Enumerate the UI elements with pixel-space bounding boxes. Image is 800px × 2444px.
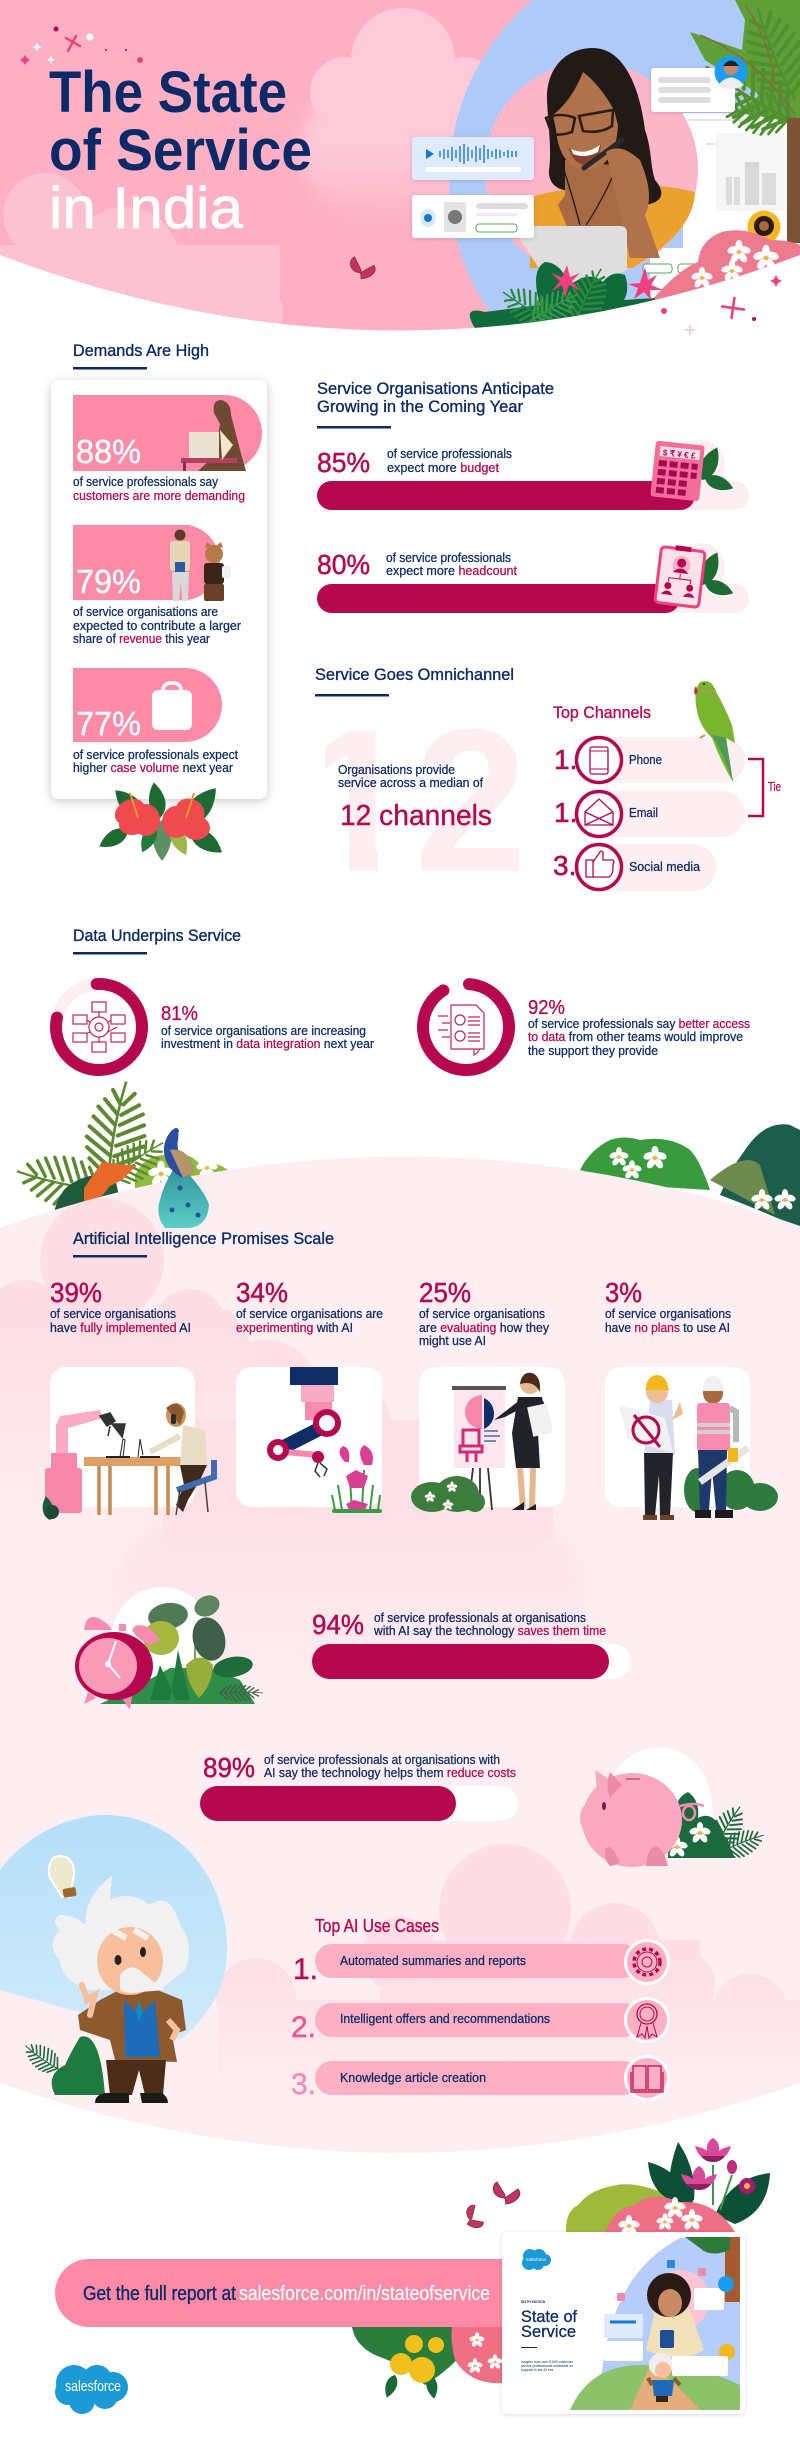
illustration: lotus and bushes — [566, 2138, 770, 2237]
stat: headcount 80%: of service professionals — [386, 551, 511, 565]
icon: document — [438, 1005, 484, 1055]
use case 2 — [291, 1997, 670, 2044]
card background — [51, 380, 267, 799]
icon: clipboard — [655, 544, 706, 607]
illustration: einstein astro — [0, 1815, 227, 2103]
stat 77%: 77% — [76, 705, 141, 742]
icon: leaves — [695, 444, 735, 495]
text: 92%: 92% — [528, 997, 565, 1019]
stat: reduce costs 89%: 89% — [203, 1752, 255, 1783]
logo: salesforce: salesforce — [65, 2378, 121, 2395]
call to action: salesforce.com/in/stateofservice — [239, 2283, 490, 2305]
stat: reduce costs 89%: of service professionals at organisations with — [264, 1753, 500, 1767]
column: evaluating: are evaluating how they — [419, 1321, 550, 1335]
call to action — [55, 2259, 505, 2327]
column: evaluating: 25% — [419, 1277, 471, 1308]
illustration: woman presenting — [411, 1373, 553, 1512]
cover title: service professionals worldwide on — [521, 2364, 573, 2368]
laptop — [515, 226, 627, 300]
heading: omnichannel: Service Goes Omnichannel — [315, 665, 514, 684]
column: evaluating: of service organisations — [419, 1307, 545, 1321]
use case 1 — [293, 1939, 670, 1986]
stat: budget 85%: of service professionals — [387, 447, 512, 461]
icon: gear — [624, 1939, 670, 1985]
icon: rosette — [624, 1997, 670, 2043]
donut: 92% — [420, 981, 512, 1073]
column: evaluating — [411, 1277, 565, 1512]
heading: top AI use cases: Top AI Use Cases — [315, 1916, 439, 1936]
stat 77%: of service professionals expect — [73, 748, 239, 762]
channel: email: Email — [629, 806, 658, 820]
title: The State — [49, 60, 287, 125]
stat: headcount 80%: 80% — [317, 549, 370, 580]
tie bracket — [748, 759, 781, 816]
channel: social media — [553, 844, 716, 891]
channel: email — [554, 791, 745, 837]
pink bush with flowers — [652, 230, 800, 300]
avatar: woman — [748, 210, 780, 244]
tie bracket: Tie — [768, 780, 781, 794]
butterfly — [349, 257, 376, 280]
stat: headcount 80%: expect more headcount — [386, 564, 518, 578]
product card — [412, 195, 534, 238]
title: in India — [49, 176, 244, 241]
stat: saves time 94% — [312, 1609, 631, 1679]
icon: leaves — [695, 549, 735, 600]
text: median channels — [338, 763, 492, 832]
illustration: orange bush — [352, 2327, 503, 2400]
stat: headcount 80% — [317, 543, 749, 613]
head — [97, 1927, 163, 1995]
blue circle backdrop — [449, 0, 800, 326]
stat 77% — [73, 668, 239, 775]
channel: social media: Social media — [629, 860, 700, 874]
icon: calculator — [650, 441, 705, 501]
stat 77%: higher case volume next year — [73, 761, 233, 775]
big number 12 backdrop: 2 — [414, 687, 527, 915]
butterfly small — [460, 2203, 489, 2232]
logo: salesforce — [55, 2365, 128, 2414]
channel: phone — [554, 737, 745, 783]
icon: book — [624, 2055, 670, 2101]
illustration: construction workers — [619, 1375, 778, 1520]
audio card — [412, 137, 534, 180]
text: 81%: 81% — [161, 1003, 198, 1025]
call to action: Get the full report at — [83, 2283, 236, 2305]
heading: growth — [317, 379, 554, 428]
hair — [52, 1876, 189, 1990]
stat 79% — [73, 525, 241, 646]
column: fully implemented: 39% — [50, 1277, 102, 1308]
illustration: robot arm and worker — [41, 1403, 214, 1521]
illustration: tropical foliage left — [12, 1076, 228, 1215]
stat: reduce costs 89%: AI say the technology helps them reduce costs — [264, 1766, 516, 1780]
foliage — [470, 262, 663, 328]
cover logo — [522, 2249, 551, 2270]
stat: reduce costs 89% — [200, 1752, 518, 1821]
column: experimenting: experimenting with AI — [236, 1321, 353, 1335]
column: no plans: of service organisations — [605, 1307, 731, 1321]
column: experimenting: 34% — [236, 1277, 288, 1308]
palm tree — [690, 0, 800, 243]
big number 12 backdrop: 1 — [300, 687, 413, 915]
big number 12 backdrop — [325, 728, 520, 871]
illustration: alarm clock — [75, 1587, 263, 1710]
heading: growth: Service Organisations Anticipate — [317, 379, 554, 398]
report cover — [502, 2232, 745, 2414]
headcount bar — [317, 584, 749, 613]
illustration: piggy bank — [580, 1747, 768, 1867]
stat 88%: customers are more demanding — [73, 489, 245, 503]
text: 92% — [528, 997, 750, 1058]
illustration: tropical foliage right — [580, 1124, 800, 1228]
title — [49, 60, 312, 241]
butterfly — [493, 2182, 520, 2204]
text: median channels: service across a median of — [338, 776, 484, 790]
bar — [312, 1644, 631, 1679]
body — [78, 1987, 186, 2062]
decorative sparkles top — [20, 26, 143, 65]
channel: email: 1. — [554, 797, 577, 828]
cover title: State of — [521, 2307, 577, 2326]
stat 79%: share of revenue this year — [73, 632, 210, 646]
text: 81%: of service organisations are increasing — [161, 1024, 366, 1038]
light bulb — [49, 1856, 77, 1898]
cover title: SIXTH EDITION — [521, 2300, 545, 2304]
heading: top channels: Top Channels — [553, 703, 651, 722]
use case 3: 3. — [291, 2068, 316, 2101]
avatar: man — [714, 56, 748, 89]
title: of Service — [49, 118, 312, 183]
stat 79%: 79% — [76, 563, 141, 600]
sky backdrop — [0, 1815, 227, 2040]
illustration: parrot — [694, 681, 735, 782]
stat: budget 85%: expect more budget — [387, 461, 500, 475]
use case 3 — [291, 2055, 670, 2101]
column: fully implemented: of service organisations — [50, 1307, 176, 1321]
heading: growth: Growing in the Coming Year — [317, 397, 523, 416]
text: 92%: to data from other teams would improve — [528, 1030, 743, 1044]
cover logo: salesforce — [526, 2257, 546, 2262]
icon: calculator: $₹¥€£ — [662, 447, 696, 461]
chat card — [651, 68, 735, 112]
panel: AI section background — [0, 1156, 800, 2153]
bar — [200, 1786, 518, 1821]
clouds — [0, 1198, 800, 2130]
donut: 81% — [54, 982, 144, 1072]
column: fully implemented — [41, 1277, 214, 1521]
column: evaluating: might use AI — [419, 1334, 486, 1348]
hero panel — [0, 0, 800, 335]
text: 81%: investment in data integration next year — [161, 1037, 374, 1051]
column: experimenting — [236, 1277, 383, 1513]
stat: saves time 94%: with AI say the technology saves them time — [373, 1624, 606, 1638]
stat: budget 85% — [317, 440, 749, 510]
illustration: hibiscus — [96, 781, 227, 861]
use case 2: Intelligent offers and recommendations — [340, 2012, 550, 2026]
plant — [19, 2036, 105, 2095]
heading: Demands Are High — [73, 341, 209, 370]
hero background — [0, 0, 800, 330]
heading: Demands Are High: Demands Are High — [73, 341, 209, 360]
cover artwork — [570, 2237, 740, 2410]
text: median channels: Organisations provide — [338, 763, 455, 777]
use case 1: Automated summaries and reports — [340, 1954, 526, 1968]
decorative sparkles bottom — [661, 275, 782, 335]
stat: budget 85%: 85% — [317, 447, 370, 478]
stat 88%: of service professionals say — [73, 475, 219, 489]
inner pink circle — [484, 62, 698, 276]
cover title: Insights from over 5,500 customer — [521, 2360, 574, 2364]
stat 88%: 88% — [76, 433, 141, 470]
column: no plans: 3% — [605, 1277, 642, 1308]
illustration: peacock — [158, 1128, 209, 1228]
heading: AI: Artificial Intelligence Promises Scale — [73, 1229, 334, 1248]
column: fully implemented: have fully implemented AI — [50, 1321, 191, 1335]
stat 88% — [73, 395, 262, 503]
use case 1: 1. — [293, 1953, 318, 1986]
stat: saves time 94%: of service professionals at organisations — [374, 1611, 586, 1625]
column: no plans: have no plans to use AI — [605, 1321, 730, 1335]
cover title: Service — [521, 2322, 576, 2341]
channel: phone: Phone — [629, 753, 662, 767]
text: median channels: 12 channels — [340, 800, 492, 832]
cover title — [521, 2300, 577, 2372]
channel: social media: 3. — [553, 850, 576, 881]
text: 92%: the support they provide — [528, 1044, 658, 1058]
cover title: support in the AI era — [521, 2368, 553, 2372]
budget bar — [317, 481, 749, 510]
heading: data: Data Underpins Service — [73, 926, 241, 945]
icon: data integration — [73, 1002, 125, 1052]
illustration: robotic gripper and flowers — [267, 1367, 382, 1513]
stat 79%: of service organisations are — [73, 605, 218, 619]
stat 79%: expected to contribute a larger — [73, 619, 241, 633]
column: no plans — [605, 1277, 778, 1520]
use case 2: 2. — [291, 2011, 316, 2044]
illustration: support agent — [530, 48, 695, 268]
column: experimenting: of service organisations are — [236, 1307, 383, 1321]
panel: demands card — [51, 380, 267, 799]
channel: phone: 1. — [554, 744, 577, 775]
use case 3: Knowledge article creation — [340, 2071, 486, 2085]
text: 81% — [161, 1003, 374, 1051]
clouds — [0, 8, 480, 324]
text: 92%: of service professionals say better access — [528, 1017, 750, 1031]
stat: saves time 94%: 94% — [312, 1609, 364, 1640]
